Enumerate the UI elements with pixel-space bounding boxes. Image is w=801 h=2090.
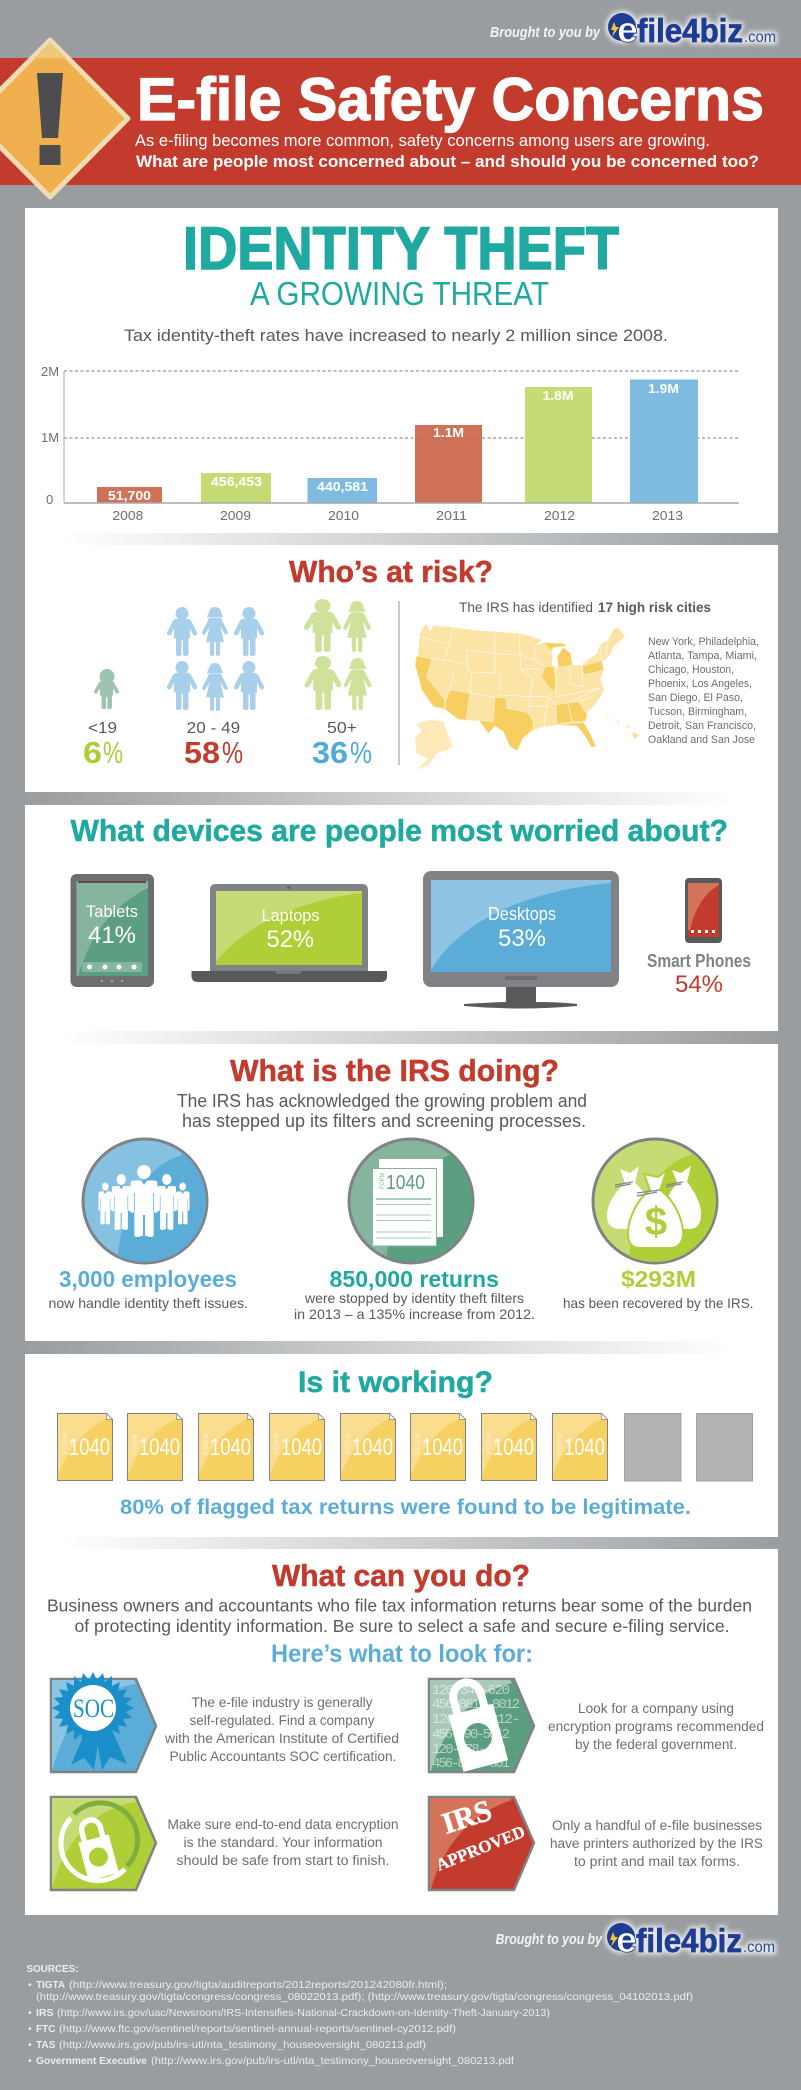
text: data encryption bbox=[168, 1817, 398, 1868]
device: laptop: Laptops bbox=[262, 906, 320, 925]
icon: SOC ribbon bbox=[51, 1672, 156, 1772]
list of high risk cities: Detroit, San Francisco, bbox=[648, 720, 756, 732]
pictogram: 8 of 10 forms legitimate: FORM bbox=[132, 1433, 139, 1454]
sources: TIGTA bbox=[36, 1979, 65, 1991]
sources: • bbox=[28, 2007, 32, 2019]
stat: returns stopped: were stopped by identity theft filters bbox=[304, 1290, 524, 1306]
text: encryption programs: Look for a company using bbox=[578, 1701, 734, 1716]
sources: (http://www.ftc.gov/sentinel/reports/sentinel-annual-reports/sentinel-cy2012.pdf) bbox=[59, 2023, 456, 2035]
sources: (http://www.treasury.gov/tigta/auditreports/2012reports/201242080fr.html); bbox=[69, 1979, 447, 1991]
header band bbox=[0, 40, 801, 197]
label: smart phones: Smart Phones bbox=[647, 951, 751, 971]
icon: employees circle bbox=[83, 1139, 210, 1265]
device: desktop monitor: Desktops bbox=[488, 904, 556, 924]
panel: what is the IRS doing bbox=[25, 1044, 778, 1341]
logo: efile4biz bottom: e bbox=[616, 1919, 637, 1960]
sources: • bbox=[28, 2023, 32, 2035]
bar chart: 2008 bbox=[112, 508, 143, 523]
intro text: The IRS has acknowledged the growing problem and bbox=[177, 1091, 587, 1111]
stat: returns stopped bbox=[294, 1266, 535, 1322]
bar chart: 0 bbox=[46, 492, 53, 507]
sponsor credit: top: Brought to you by bbox=[490, 24, 601, 41]
sponsor credit: bottom bbox=[496, 1919, 775, 1960]
logo: efile4biz top: .com bbox=[744, 29, 776, 46]
sponsor credit: bottom: Brought to you by bbox=[496, 1931, 603, 1948]
sources: SOURCES: bbox=[26, 1963, 78, 1975]
logo: efile4biz bottom: file4biz bbox=[636, 1922, 742, 1959]
bar chart: 2M bbox=[41, 364, 59, 379]
intro text: of protecting identity information. Be sure to select a safe and secure e-filing service. bbox=[74, 1616, 730, 1636]
text: SOC certification: Public Accountants SOC certification. bbox=[170, 1749, 396, 1764]
age group: 50 plus: % bbox=[350, 735, 372, 770]
icon: IRS approved stamp bbox=[429, 1794, 534, 1890]
list of high risk cities: New York, Philadelphia, bbox=[648, 636, 759, 648]
text: SOC certification: with the American Institute of Certified bbox=[164, 1731, 399, 1746]
bar chart: 2013 bbox=[652, 508, 683, 523]
icon: encryption lock numbers: 456-8612-8012 bbox=[432, 1697, 520, 1713]
sources: • bbox=[28, 2055, 32, 2067]
list of high risk cities: Atlanta, Tampa, Miami, bbox=[648, 650, 757, 662]
pictogram: 8 of 10 forms legitimate: 1040 bbox=[422, 1434, 463, 1461]
subtitle: As e-filing becomes more common, safety concerns among users are growing. bbox=[135, 131, 710, 150]
logo: efile4biz top: file4biz bbox=[637, 12, 743, 49]
sources: TAS bbox=[36, 2039, 56, 2051]
device: tablet bbox=[70, 874, 154, 987]
pictogram: 8 of 10 forms legitimate: 1040 bbox=[281, 1434, 322, 1461]
age group: under 19: <19 bbox=[88, 720, 117, 737]
logo: efile4biz top: e bbox=[617, 9, 638, 50]
panel: is it working bbox=[25, 1354, 778, 1537]
bar chart: 2009 bbox=[220, 508, 251, 523]
icon: encryption lock numbers: 120-978-420 bbox=[432, 1742, 506, 1758]
bar chart: 1M bbox=[41, 430, 59, 445]
panel: devices bbox=[25, 805, 778, 1031]
heading: identity theft: IDENTITY THEFT bbox=[183, 215, 619, 282]
text: SOC certification: self-regulated. Find a company bbox=[190, 1713, 375, 1728]
device: laptop: 52% bbox=[266, 926, 314, 953]
device: laptop bbox=[192, 884, 387, 982]
pictogram: 8 of 10 forms legitimate: 1040 bbox=[564, 1434, 605, 1461]
text: encryption programs: by the federal government. bbox=[575, 1737, 737, 1752]
pictogram: 8 of 10 forms legitimate: 1040 bbox=[210, 1434, 251, 1461]
age group: 50 plus: 50+ bbox=[327, 720, 357, 737]
intro text: Business owners and accountants who file tax information returns bear some of the burden bbox=[47, 1596, 752, 1616]
stat: money recovered bbox=[563, 1266, 754, 1311]
pictogram: 8 of 10 forms legitimate: FORM bbox=[345, 1433, 352, 1454]
pictogram: 8 of 10 forms legitimate: 1040 bbox=[69, 1434, 110, 1461]
age group: 20 to 49: 58 bbox=[184, 735, 220, 770]
stat: employees: 3,000 employees bbox=[59, 1266, 237, 1292]
logo: efile4biz bottom: .com bbox=[743, 1939, 775, 1956]
label: smart phones: 54% bbox=[675, 971, 723, 998]
list of high risk cities: Chicago, Houston, bbox=[648, 664, 734, 676]
icon: IRS approved stamp: APPROVED bbox=[433, 1822, 528, 1875]
title: E-file Safety Concerns bbox=[137, 66, 764, 133]
text: data encryption: should be safe from start to finish. bbox=[176, 1853, 390, 1868]
intro text: Tax identity-theft rates have increased to nearly 2 million since 2008. bbox=[124, 326, 668, 345]
bar chart: 51,700 bbox=[108, 488, 151, 503]
stat: money recovered: has been recovered by the IRS. bbox=[563, 1295, 754, 1311]
panel: what can you do bbox=[25, 1549, 778, 1915]
subheading: A GROWING THREAT bbox=[250, 275, 549, 312]
heading: devices: What devices are people most worried about? bbox=[70, 813, 728, 848]
device: smart phone bbox=[685, 878, 722, 943]
logo: efile4biz bottom bbox=[607, 1919, 775, 1960]
sources: • bbox=[28, 2039, 32, 2051]
map caption: The IRS has identified bbox=[459, 600, 593, 615]
sources: IRS bbox=[36, 2007, 54, 2019]
heading: what can you do: What can you do? bbox=[272, 1558, 530, 1593]
text: SOC certification: The e-file industry is generally bbox=[192, 1695, 373, 1710]
icon: SOC ribbon: SOC bbox=[73, 1694, 114, 1723]
sources: Government Executive bbox=[36, 2055, 147, 2067]
icon: money bags circle: $ bbox=[645, 1200, 667, 1244]
bar chart: 1.8M bbox=[542, 388, 574, 403]
icon: end-to-end encryption bbox=[51, 1797, 156, 1890]
sources: (http://www.irs.gov/pub/irs-utl/nta_testimony_houseoversight_080213.pdf) bbox=[59, 2039, 426, 2051]
stat: money recovered: $293M bbox=[621, 1266, 696, 1292]
stat: returns stopped: in 2013 – a 135% increase from 2012. bbox=[294, 1306, 535, 1322]
list of high risk cities: Tucson, Birmingham, bbox=[648, 706, 747, 718]
logo: efile4biz bottom: .com bbox=[743, 1939, 775, 1956]
intro text: has stepped up its filters and screening processes. bbox=[182, 1111, 586, 1131]
text: SOC certification bbox=[164, 1695, 399, 1764]
intro text bbox=[47, 1596, 752, 1636]
heading: IRS doing: What is the IRS doing? bbox=[230, 1053, 559, 1088]
bar chart: 2010 bbox=[328, 508, 359, 523]
pictogram: 8 of 10 forms legitimate: FORM bbox=[486, 1433, 493, 1454]
list of high risk cities: Oakland and San Jose bbox=[648, 734, 755, 746]
icon: 1040 forms circle: 1040 bbox=[386, 1172, 425, 1194]
pictogram: 8 of 10 forms legitimate bbox=[58, 1414, 752, 1481]
list of high risk cities bbox=[648, 636, 759, 746]
icon: 1040 forms circle bbox=[349, 1139, 480, 1265]
pictogram: 8 of 10 forms legitimate: FORM bbox=[557, 1433, 564, 1454]
heading: who's at risk: Who’s at risk? bbox=[289, 554, 493, 589]
icon: 1040 forms circle: FORM bbox=[379, 1173, 386, 1189]
pictogram: 8 of 10 forms legitimate: FORM bbox=[203, 1433, 210, 1454]
bar chart bbox=[41, 364, 739, 523]
bar chart: 2012 bbox=[544, 508, 575, 523]
pictogram: 8 of 10 forms legitimate: 1040 bbox=[352, 1434, 393, 1461]
text: data encryption: is the standard. Your information bbox=[184, 1835, 382, 1850]
intro text bbox=[177, 1091, 587, 1131]
sponsor credit: top bbox=[490, 9, 776, 50]
sources: (http://www.irs.gov/uac/Newsroom/IRS-Intensifies-National-Crackdown-on-Identity-Theft-January-2013) bbox=[57, 2007, 550, 2019]
text: authorized printers: have printers authorized by the IRS bbox=[550, 1836, 763, 1851]
label: smart phones bbox=[647, 951, 751, 998]
icon: money bags circle bbox=[593, 1139, 725, 1265]
logo: efile4biz top bbox=[608, 9, 776, 50]
age group: 20 to 49: 20 - 49 bbox=[187, 720, 240, 737]
sources: FTC bbox=[36, 2023, 56, 2035]
panel: who's at risk bbox=[25, 545, 778, 792]
icon: encryption lock numbers: 120-348-620 bbox=[432, 1683, 510, 1699]
logo: efile4biz top: file4biz bbox=[637, 12, 743, 49]
bar chart: 440,581 bbox=[317, 479, 368, 494]
subtitle bbox=[135, 131, 759, 171]
icon: encryption lock numbers: 120-9745212- bbox=[432, 1712, 520, 1728]
text: encryption programs: encryption programs recommended bbox=[548, 1719, 764, 1734]
text: encryption programs bbox=[548, 1701, 764, 1752]
age group: 20 to 49: % bbox=[222, 735, 243, 770]
text: authorized printers bbox=[550, 1818, 763, 1869]
pictogram: 8 of 10 forms legitimate: FORM bbox=[274, 1433, 281, 1454]
device: tablet: Tablets bbox=[86, 902, 138, 921]
stat: employees bbox=[48, 1266, 248, 1311]
text: authorized printers: Only a handful of e-file businesses bbox=[552, 1818, 762, 1833]
device: tablet: 41% bbox=[88, 922, 136, 949]
sources: (http://www.irs.gov/pub/irs-utl/nta_testimony_houseoversight_080213.pdf bbox=[151, 2055, 514, 2067]
subheading: what to look for: Here’s what to look for: bbox=[271, 1640, 533, 1668]
text: authorized printers: to print and mail tax forms. bbox=[574, 1854, 740, 1869]
age group: under 19 bbox=[83, 669, 123, 770]
list of high risk cities: San Diego, El Paso, bbox=[648, 692, 743, 704]
age group: under 19: 6 bbox=[83, 735, 102, 770]
sources: • bbox=[28, 1979, 32, 1991]
logo: efile4biz bottom: file4biz bbox=[636, 1922, 742, 1959]
bar chart: 456,453 bbox=[211, 474, 262, 489]
subtitle: What are people most concerned about – and should you be concerned too? bbox=[136, 152, 759, 171]
icon: warning diamond bbox=[0, 40, 128, 197]
callout: 80 percent: 80% of flagged tax returns were found to be legitimate. bbox=[120, 1496, 691, 1519]
age group: 20 to 49 bbox=[167, 607, 264, 770]
icon: encryption lock numbers: 456-690-5012 bbox=[432, 1727, 510, 1743]
heading: is it working: Is it working? bbox=[298, 1366, 493, 1399]
map: United States high risk states bbox=[415, 623, 639, 770]
logo: efile4biz top: .com bbox=[744, 29, 776, 46]
map caption: 17 high risk cities bbox=[598, 600, 711, 615]
pictogram: 8 of 10 forms legitimate: FORM bbox=[415, 1433, 422, 1454]
bar chart: 2011 bbox=[436, 508, 467, 523]
pictogram: 8 of 10 forms legitimate: 1040 bbox=[139, 1434, 180, 1461]
sources bbox=[26, 1963, 693, 2067]
device: desktop monitor bbox=[423, 871, 619, 1008]
stat: returns stopped: 850,000 returns bbox=[330, 1266, 499, 1292]
age group: 50 plus: 36 bbox=[312, 735, 348, 770]
bar chart: 1.9M bbox=[648, 381, 679, 396]
icon: encryption lock numbers bbox=[429, 1673, 534, 1772]
list of high risk cities: Phoenix, Los Angeles, bbox=[648, 678, 752, 690]
stat: employees: now handle identity theft issues. bbox=[48, 1295, 248, 1311]
pictogram: 8 of 10 forms legitimate: 1040 bbox=[493, 1434, 534, 1461]
text: data encryption: Make sure end-to-end data encryption bbox=[168, 1817, 398, 1832]
age group: 50 plus bbox=[304, 599, 372, 770]
pictogram: 8 of 10 forms legitimate: FORM bbox=[62, 1433, 69, 1454]
icon: IRS approved stamp: IRS bbox=[438, 1794, 496, 1841]
map caption bbox=[459, 600, 711, 615]
device: desktop monitor: 53% bbox=[498, 925, 546, 952]
panel: identity theft bbox=[25, 208, 778, 533]
icon: encryption lock numbers: 456-8690-801 bbox=[432, 1756, 510, 1772]
sources: (http://www.treasury.gov/tigta/congress/congress_08022013.pdf); (http://www.treasury.gov/tigta/congress/congress_04102013.pdf) bbox=[36, 1991, 693, 2003]
bar chart: 1.1M bbox=[433, 425, 464, 440]
age group: under 19: % bbox=[103, 735, 123, 770]
